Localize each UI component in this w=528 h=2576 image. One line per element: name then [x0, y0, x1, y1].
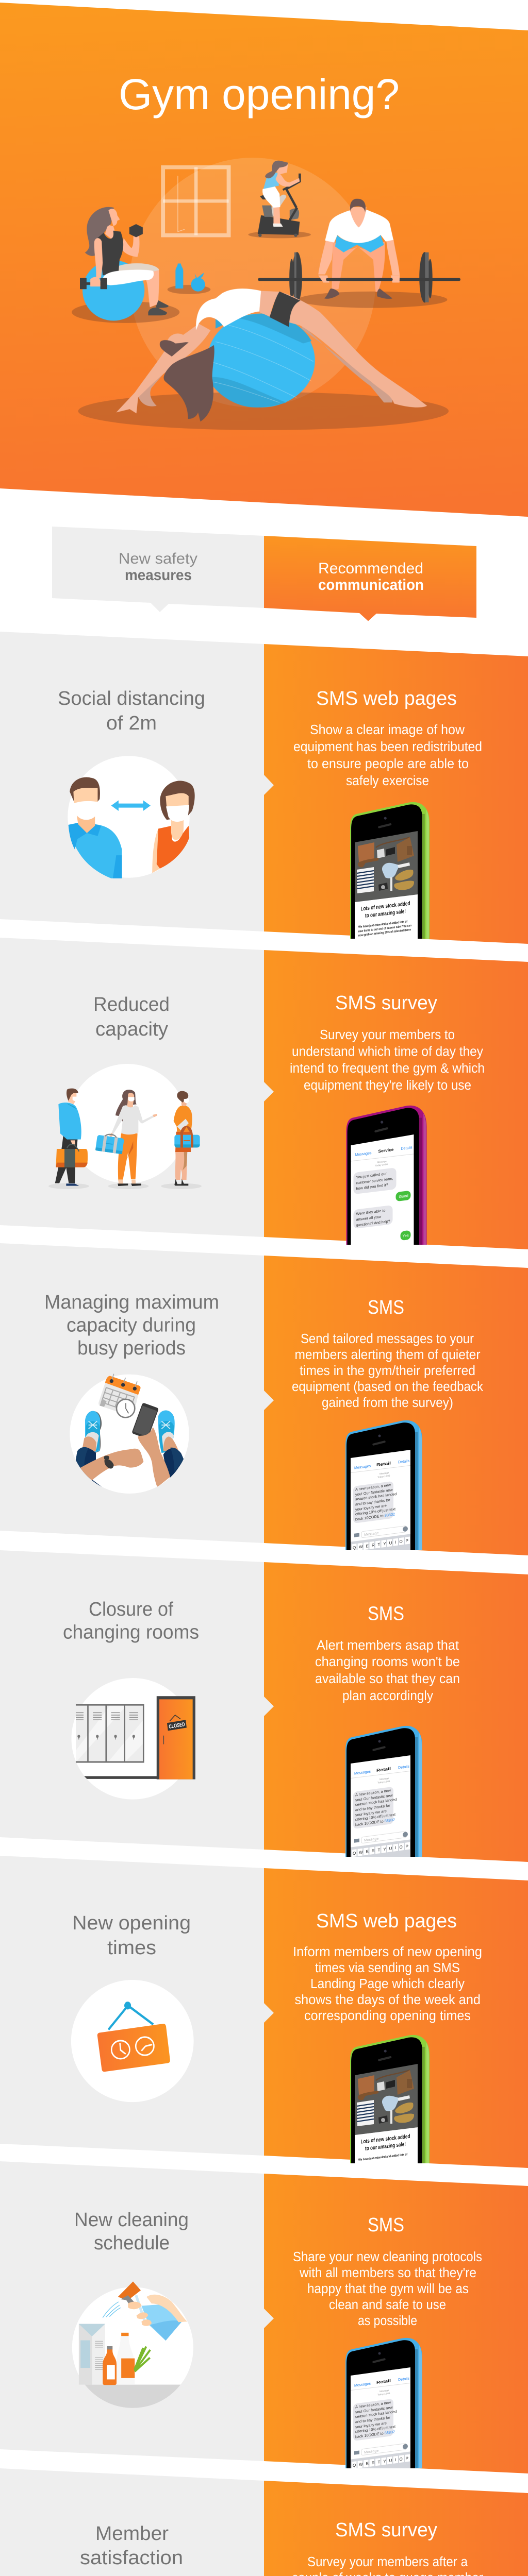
message: SMS: Share your new cleaning protocols: [293, 2250, 482, 2264]
message: SMS: gained from the survey): [322, 1396, 453, 1410]
door: [157, 1696, 195, 1780]
panel: managing maximum capacity: [0, 1243, 528, 1555]
phone: SMS message: Message: [380, 1471, 389, 1475]
phone: SMS message: Message: [364, 1532, 378, 1537]
phone: SMS message: season stock has landed: [355, 1797, 397, 1807]
person left: [55, 1089, 88, 1186]
heading: times: [107, 1937, 156, 1959]
column heading: recommended communication: communication: [318, 577, 424, 594]
handheld phone: [131, 1402, 159, 1439]
phone: SMS message: your loyalty we are: [355, 2421, 387, 2429]
heading: Managing maximum: [44, 1292, 219, 1313]
panel: new opening times: [0, 1856, 528, 2212]
message: SMS: SMS: [368, 1603, 404, 1625]
heading: New opening: [72, 1912, 191, 1934]
message: SMS survey: [291, 2519, 484, 2576]
phone: SMS message: Retail: [376, 2378, 391, 2385]
phone: SMS survey: customer service team,: [356, 1176, 393, 1185]
phone: web page: [350, 802, 430, 939]
message: SMS web pages: safely exercise: [346, 774, 429, 788]
message: SMS: Send tailored messages to your: [301, 1332, 474, 1346]
water bottle and apple: [175, 264, 205, 292]
phone: SMS message: back 10CODE to 88802: [355, 1512, 395, 1521]
phone: SMS message: Message: [380, 2389, 389, 2393]
icon: distance arrow: [111, 800, 151, 811]
phone: web page: We have just extended and added lots of: [358, 920, 408, 929]
background circle: [129, 158, 375, 408]
phone: SMS message: offering 10% off just text: [355, 1506, 395, 1516]
icon: lockers and closed door: [70, 1678, 195, 1800]
phone: SMS message: back 10CODE to 88802: [355, 2429, 395, 2439]
heading: capacity during: [67, 1315, 196, 1336]
message: SMS: equipment (based on the feedback: [292, 1380, 483, 1394]
message: SMS: Alert members asap that: [317, 1638, 459, 1653]
phone: web page: Lots of new stock added: [361, 2133, 410, 2145]
phone: SMS survey: how did you find it?: [356, 1182, 388, 1191]
phone: SMS message: offering 10% off just text: [355, 2424, 395, 2434]
column heading: recommended communication: Recommended: [318, 560, 423, 577]
spray bottle: [103, 2281, 187, 2341]
phone: SMS message: Today 10:06: [377, 1780, 390, 1784]
lockers: [70, 1704, 144, 1762]
phone: SMS message: back 10CODE to 88802: [355, 1817, 395, 1827]
message: SMS survey: Survey your members after a: [307, 2555, 468, 2569]
phone: SMS message: Messages: [354, 1769, 371, 1776]
heading: changing rooms: [63, 1622, 199, 1643]
person right: [174, 1091, 200, 1185]
message: SMS survey: equipment they're likely to use: [304, 1078, 471, 1093]
phone: web page: [350, 2035, 430, 2163]
icon: cleaning products and spray: [68, 2281, 195, 2411]
heading: [74, 2209, 189, 2254]
phone: SMS survey: You just called our: [356, 1171, 387, 1180]
phone: SMS message: you! Our fantastic new: [355, 1487, 393, 1497]
icon: two masked people apart: [68, 756, 195, 878]
message: SMS: SMS: [368, 1297, 404, 1318]
white bottle: [116, 2333, 150, 2385]
column heading: new safety measures: [52, 527, 264, 612]
heading: satisfaction: [80, 2547, 183, 2569]
title: Gym opening?: [119, 70, 400, 118]
column heading: recommended communication: [264, 536, 476, 621]
phone: SMS message: season stock has landed: [355, 1492, 397, 1501]
heading: [58, 688, 205, 734]
message: SMS survey: [290, 992, 485, 1093]
phone: SMS message: Message: [364, 1837, 378, 1842]
phone: web page: We have just extended and added lots of: [358, 2153, 408, 2162]
phone: SMS message: [345, 1726, 422, 1857]
phone: web page: Lots of new stock added: [361, 901, 410, 912]
heading: busy periods: [77, 1337, 186, 1359]
column heading: new safety measures: New safety: [119, 550, 197, 567]
phone: SMS message: you! Our fantastic new: [355, 1793, 393, 1802]
panel: hero: [0, 3, 528, 517]
woman with dumbbells: [80, 207, 169, 320]
heading: New cleaning: [74, 2209, 189, 2231]
panel: new cleaning schedule: [0, 2161, 528, 2508]
phone: SMS message: QWERTYUIOP: [353, 1844, 408, 1856]
phone: SMS message: QWERTYUIOP: [353, 1538, 408, 1550]
woman on exercise bike: [258, 161, 301, 237]
icon: hanging sign with clocks: [71, 1980, 194, 2102]
message: SMS: changing rooms won't be: [315, 1655, 460, 1669]
phone: SMS message: season stock has landed: [355, 2409, 397, 2419]
message: SMS web pages: corresponding opening times: [304, 2009, 471, 2023]
phone: SMS message: Details: [398, 2376, 409, 2382]
floor shadows: [72, 231, 449, 430]
phone: SMS survey: Message: [377, 1160, 387, 1164]
message: SMS survey: SMS survey: [335, 992, 437, 1014]
phone: SMS message: and to say thanks for: [355, 2415, 390, 2424]
message: SMS: as possible: [358, 2314, 417, 2328]
message: SMS survey: intend to frequent the gym & which: [290, 1061, 485, 1076]
message: SMS web pages: Landing Page which clearly: [310, 1977, 465, 1991]
phone: SMS message: Details: [398, 1459, 409, 1465]
phone: SMS message: A new season, a new: [355, 1482, 391, 1492]
phone: SMS survey: Service: [378, 1147, 394, 1154]
message: SMS web pages: SMS web pages: [316, 688, 457, 709]
message: SMS: SMS: [368, 2214, 404, 2236]
message: SMS: with all members so that they're: [299, 2266, 476, 2280]
phone: SMS message: Today 10:06: [377, 2392, 390, 2396]
heading: Reduced: [93, 994, 170, 1015]
heading: Social distancing: [58, 688, 205, 709]
phone: SMS message: your loyalty we are: [355, 1503, 387, 1512]
column heading: new safety measures: measures: [125, 567, 192, 584]
message: SMS: [293, 2214, 482, 2328]
message: SMS web pages: [293, 688, 482, 788]
panel: closure of changing rooms: [0, 1550, 528, 1896]
message: SMS: [292, 1297, 483, 1410]
message: SMS: members alerting them of quieter: [295, 1348, 481, 1362]
orange bottle: [103, 2346, 117, 2385]
message: SMS: clean and safe to use: [329, 2298, 446, 2312]
panel: member satisfaction: [0, 2468, 528, 2576]
message: SMS web pages: [293, 1910, 482, 2023]
phone: SMS survey: answer all your: [356, 1214, 382, 1222]
calendar: [98, 1374, 141, 1415]
message: SMS survey: Survey your members to: [320, 1028, 455, 1042]
message: SMS web pages: shows the days of the week and: [295, 1993, 481, 2007]
clock: [117, 1399, 135, 1417]
message: SMS web pages: equipment has been redistributed: [293, 740, 482, 754]
phone: web page: now grab an amazing 25% of selected items: [358, 928, 411, 938]
heading: [93, 994, 170, 1040]
phone: SMS message: offering 10% off just text: [355, 1812, 395, 1822]
message: SMS: happy that the gym will be as: [307, 2282, 469, 2296]
phone: SMS message: and to say thanks for: [355, 1803, 390, 1812]
woman stretching on exercise ball: [116, 289, 427, 421]
phone: SMS survey: [346, 1106, 427, 1245]
heading: [63, 1599, 199, 1643]
heading: [72, 1912, 191, 1959]
message: SMS web pages: times via sending an SMS: [315, 1961, 460, 1975]
phone: SMS message: [345, 2338, 422, 2468]
phone: SMS survey: Good: [399, 1193, 408, 1199]
phone: SMS message: Messages: [354, 2381, 371, 2388]
phone: SMS message: Messages: [354, 1464, 371, 1470]
phone: SMS survey: Were they able to: [356, 1208, 385, 1216]
heading: [44, 1292, 219, 1359]
message: SMS: available so that they can: [315, 1672, 460, 1686]
panel: social distancing: [0, 632, 528, 979]
window: [163, 167, 229, 235]
phone: web page: to our amazing sale!: [365, 2141, 406, 2152]
phone: SMS message: Retail: [376, 1461, 391, 1467]
man lifting barbell: [258, 199, 460, 302]
heading: of 2m: [106, 713, 157, 734]
phone: SMS message: and to say thanks for: [355, 1498, 390, 1506]
heading: schedule: [94, 2232, 170, 2254]
message: SMS web pages: Show a clear image of how: [310, 723, 465, 737]
phone: SMS survey: Today 10:06: [375, 1163, 388, 1167]
phone: web page: to our amazing sale!: [365, 908, 406, 919]
legs, shoes and arms: [76, 1410, 184, 1490]
message: SMS survey: understand which time of day they: [292, 1045, 483, 1059]
heading: Member: [95, 2523, 169, 2545]
phone: SMS survey: questions? And help?: [356, 1219, 390, 1228]
phone: SMS message: Today 10:06: [377, 1475, 390, 1479]
phone: SMS message: Message: [364, 2449, 378, 2454]
message: SMS web pages: Inform members of new opening: [293, 1945, 482, 1959]
message: SMS: plan accordingly: [342, 1689, 433, 1703]
phone: SMS survey: Messages: [355, 1150, 372, 1157]
message: SMS web pages: SMS web pages: [316, 1910, 457, 1932]
illustration: gym scene: [72, 158, 460, 430]
icon: three people queueing with bags: [48, 1064, 202, 1189]
heading: capacity: [95, 1019, 168, 1040]
heading: [80, 2523, 183, 2569]
message: SMS: [315, 1603, 460, 1703]
phone: SMS message: Retail: [376, 1766, 391, 1773]
heading: Closure of: [89, 1599, 173, 1620]
phone: SMS message: you! Our fantastic new: [355, 2405, 393, 2414]
message: SMS survey: SMS survey: [335, 2519, 437, 2541]
phone: SMS message: Details: [398, 1764, 409, 1770]
box: [79, 2324, 105, 2385]
closed sign: CLOSED: [169, 1722, 185, 1730]
phone: SMS message: your loyalty we are: [355, 1809, 387, 1817]
phone: SMS survey: Yes: [403, 1233, 409, 1239]
phone: SMS message: A new season, a new: [355, 1788, 391, 1797]
phone: SMS message: QWERTYUIOP: [353, 2456, 408, 2468]
phone: SMS survey: Details: [401, 1145, 412, 1151]
panel: reduced capacity: [0, 938, 528, 1287]
phone: SMS message: Message: [380, 1777, 389, 1781]
person centre: [95, 1090, 157, 1186]
phone: SMS message: [345, 1420, 422, 1550]
phone: SMS message: A new season, a new: [355, 2400, 391, 2409]
phone: web page: new items to our end of season sale! You can: [358, 924, 411, 934]
message: SMS: times in the gym/their preferred: [300, 1364, 475, 1378]
icon: top-down person with calendar, watch and phone: [70, 1374, 189, 1494]
message: SMS web pages: to ensure people are able to: [307, 757, 469, 771]
